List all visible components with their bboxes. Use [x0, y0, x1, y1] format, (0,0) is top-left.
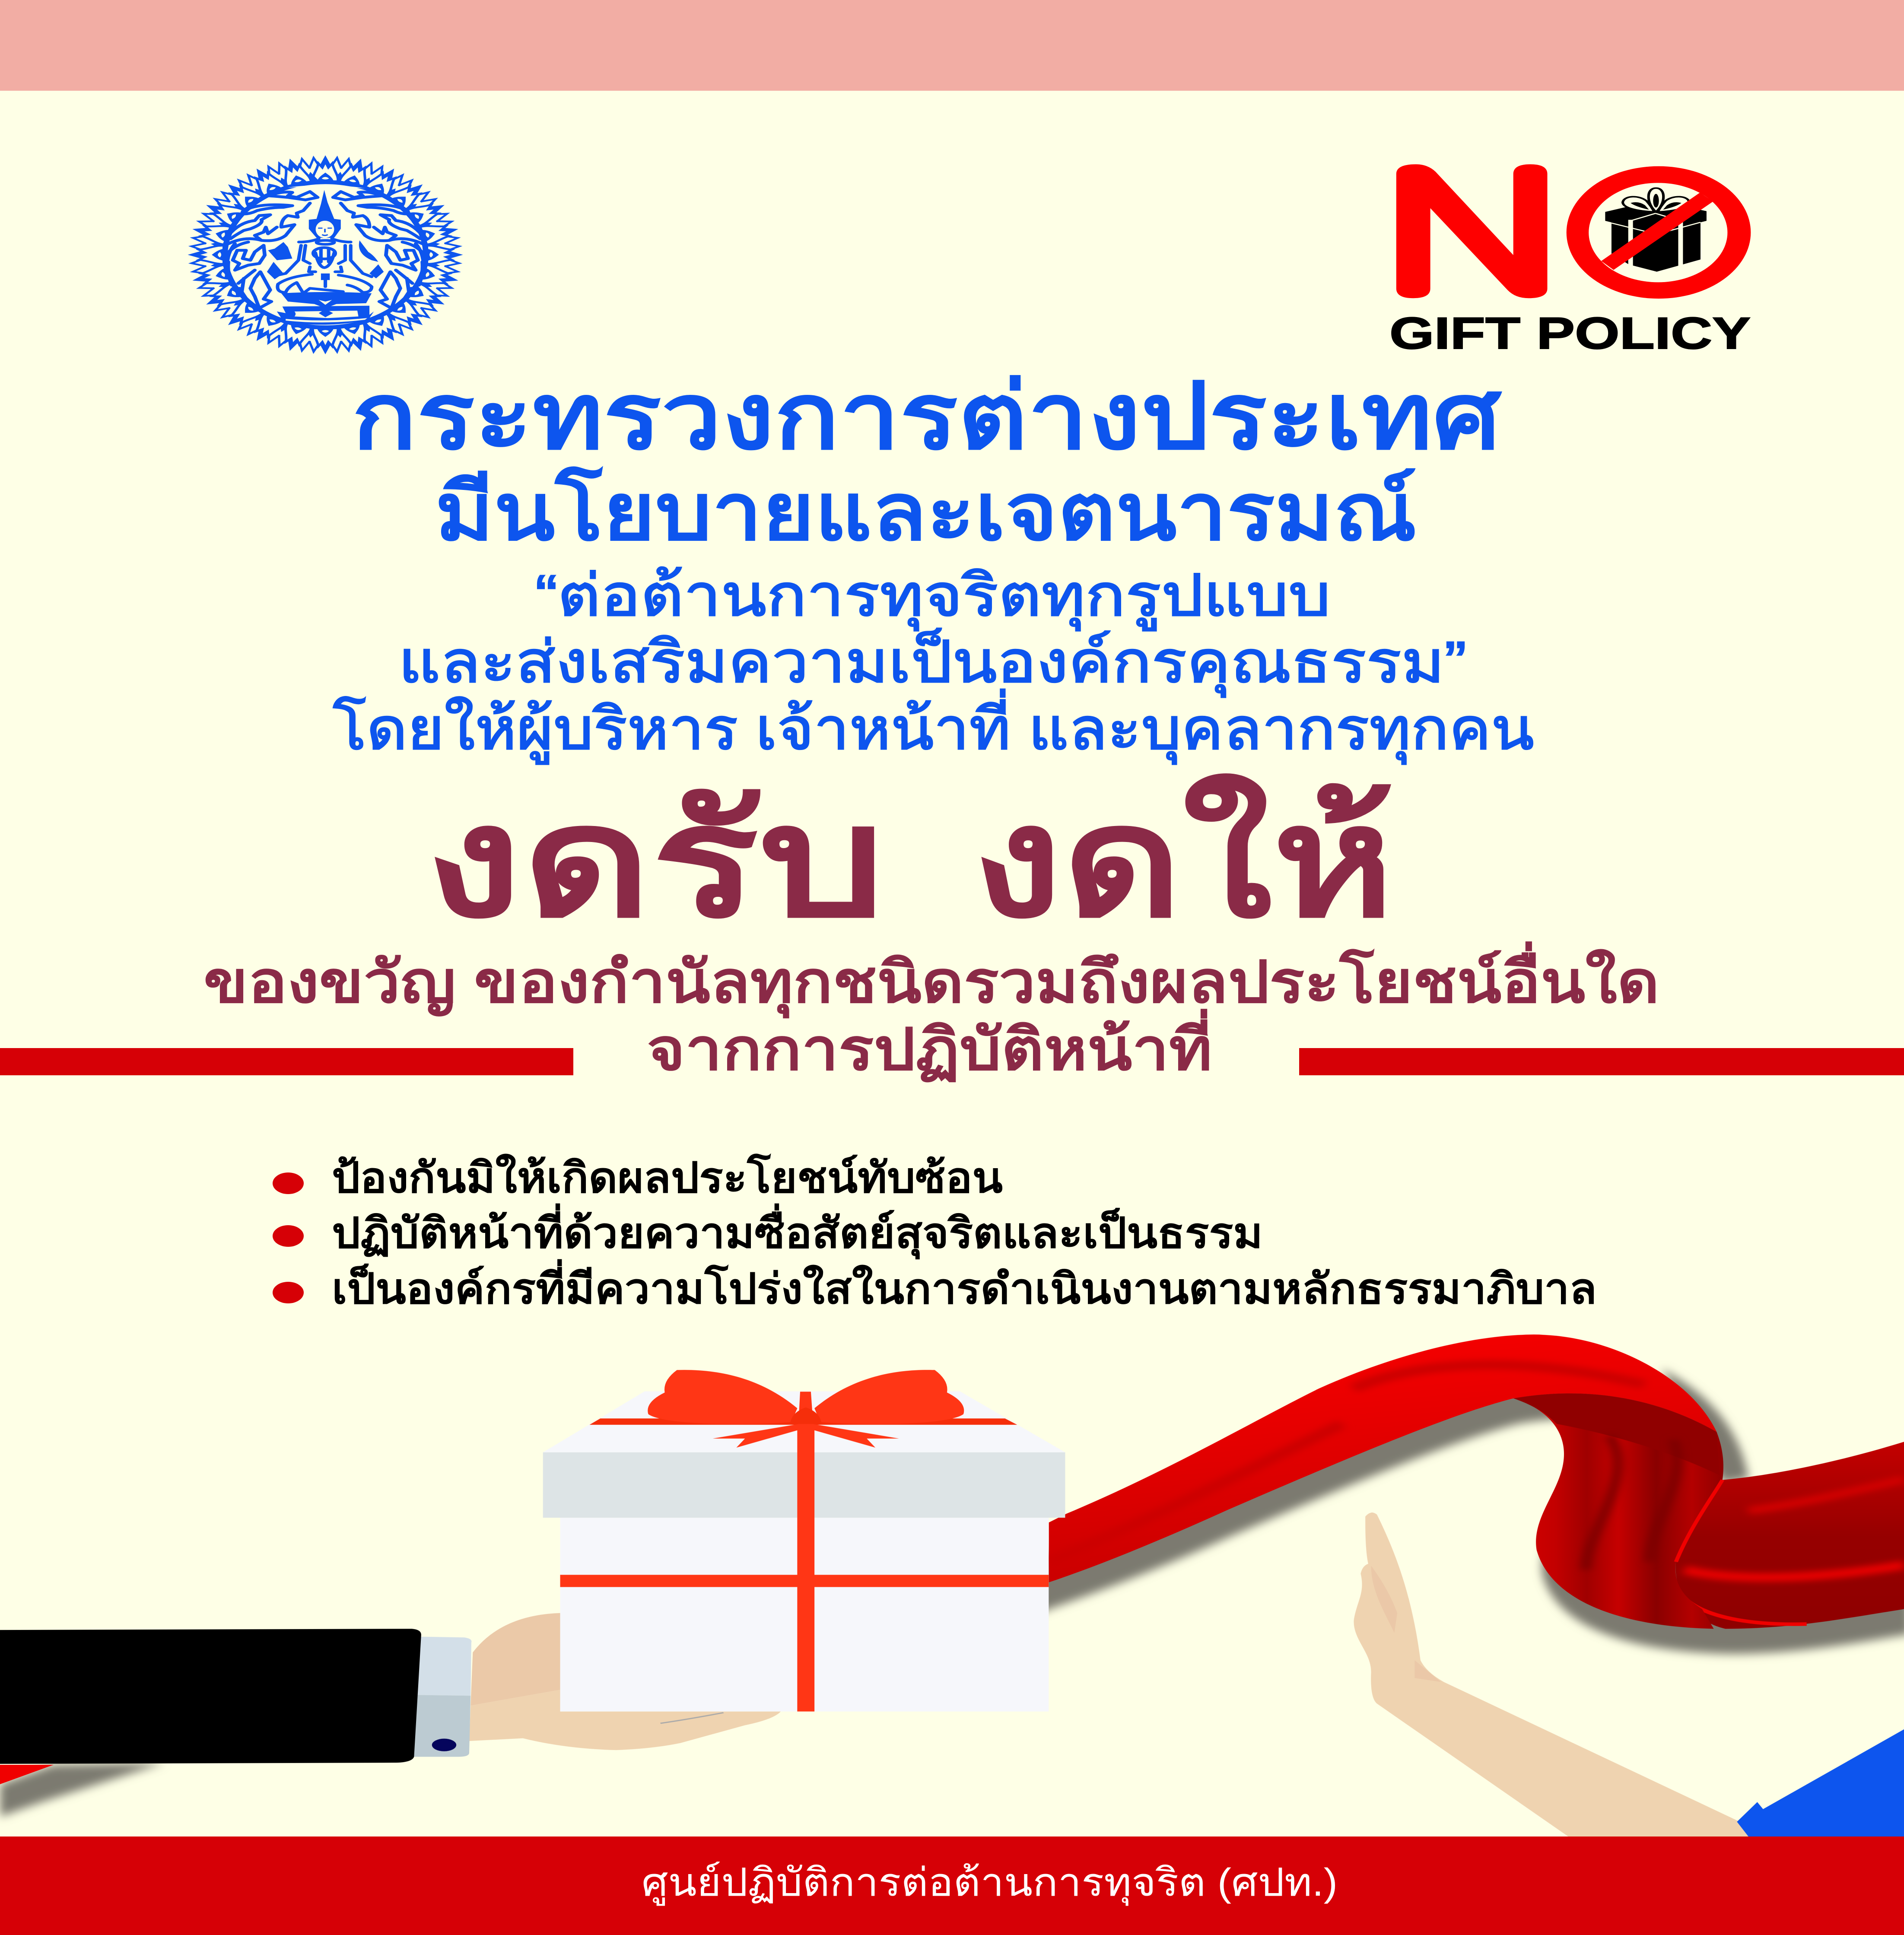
word: no receiving: งดรับ [425, 775, 885, 949]
right divider bar [1299, 1048, 1904, 1075]
bullet list [273, 1153, 1597, 1312]
text: anti corruption line 1: “ต่อต้านการทุจริตทุกรูปแบบ [535, 563, 1331, 631]
bullet 3 dot [273, 1282, 304, 1303]
right hand refusing [1354, 1512, 1748, 1837]
bullet 2 dot [273, 1225, 304, 1247]
word: no giving: งดให้ [972, 772, 1394, 949]
left ribbon remnant [0, 1765, 54, 1784]
ribbon tail [1675, 1442, 1904, 1629]
footer band [0, 1837, 1904, 1935]
hand palm [469, 1690, 781, 1750]
text: gifts line 1: ของขวัญ ของกำนัลทุกชนิดรวมถึงผลประโยชน์อื่นใด [203, 941, 1659, 1019]
left divider bar [0, 1048, 573, 1075]
gift box [543, 1370, 1065, 1712]
footer text: ศูนย์ปฏิบัติการต่อต้านการทุจริต (ศปท.) [642, 1861, 1338, 1906]
icon: prohibited gift [1567, 166, 1751, 299]
ribbon upper band [1049, 1334, 1716, 1582]
bullet 1 text: ป้องกันมิให้เกิดผลประโยชน์ทับซ้อน [332, 1153, 1003, 1201]
bullet 2 text: ปฏิบัติหน้าที่ด้วยความซื่อสัตย์สุจริตและเป็นธรรม [332, 1203, 1263, 1260]
top band [0, 0, 1904, 91]
red ribbon shadow [0, 1360, 1904, 1817]
ribbon fold [1513, 1393, 1723, 1629]
text: gifts line 2: จากการปฏิบัติหน้าที่ [647, 1008, 1212, 1083]
heading: no receiving no giving [425, 772, 1394, 949]
bullet 3 text: เป็นองค์กรที่มีความโปร่งใสในการดำเนินงานตามหลักธรรมาภิบาล [332, 1259, 1597, 1312]
text: anti corruption line 2: และส่งเสริมความเป็นองค์กรคุณธรรม” [398, 628, 1466, 698]
black sleeve [0, 1629, 421, 1764]
gift bow [648, 1370, 964, 1424]
no gift policy logo [1389, 164, 1751, 359]
heading: policy and intent: มีนโยบายและเจตนารมณ์ [435, 466, 1417, 557]
left hand and gift [0, 1370, 1065, 1764]
red ribbon [1049, 1334, 1904, 1629]
shirt cuff [414, 1636, 471, 1757]
bullet 1 dot [273, 1172, 304, 1194]
title: ministry: กระทรวงการต่างประเทศ [352, 364, 1502, 468]
logo caption: GIFT POLICY [1389, 308, 1751, 359]
seal logo [130, 124, 493, 406]
text: anti corruption line 3: โดยให้ผู้บริหาร เจ้าหน้าที่ และบุคลากรทุกคน [333, 689, 1534, 765]
icon: letter N [1396, 164, 1547, 298]
blue sleeve [1737, 1729, 1904, 1837]
